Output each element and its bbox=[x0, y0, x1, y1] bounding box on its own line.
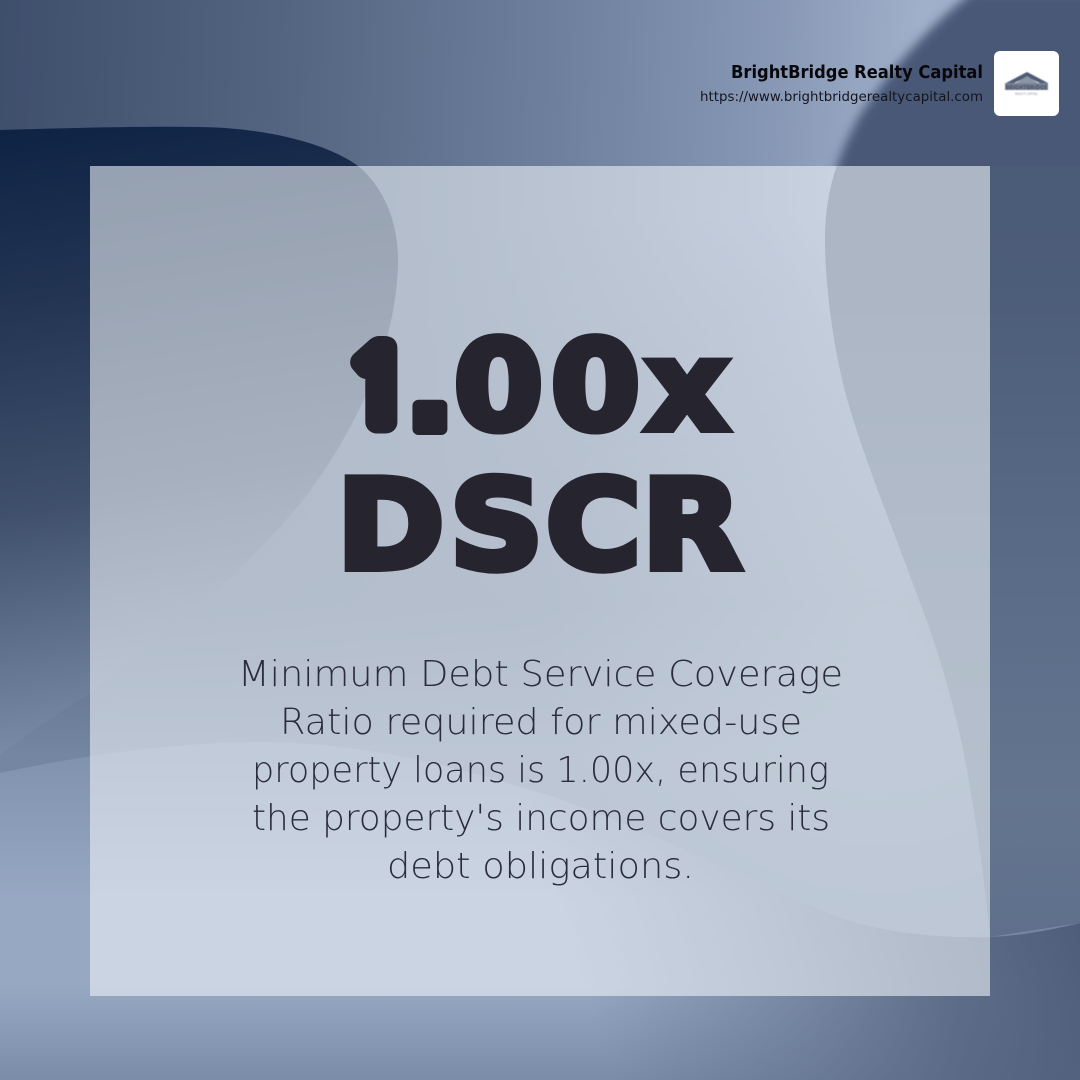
background shape: bottom wave bbox=[0, 742, 1080, 1080]
headline line 1: 1.00x bbox=[347, 315, 728, 458]
background shape: right dark band bbox=[825, 0, 1080, 937]
logo: BRIGHTBRIDGE bbox=[1006, 84, 1048, 92]
headline: 1.00x DSCR bbox=[337, 315, 742, 597]
description text: property loans is 1.00x, ensuring bbox=[252, 750, 829, 791]
brand header bbox=[700, 51, 1059, 116]
logo: REALTY CAPITAL bbox=[1015, 92, 1038, 96]
logo bbox=[994, 51, 1059, 116]
headline line 2: DSCR bbox=[337, 454, 742, 597]
description text: Ratio required for mixed-use bbox=[280, 702, 802, 743]
translucent content panel bbox=[90, 166, 990, 996]
brand url: https://www.brightbridgerealtycapital.com bbox=[700, 90, 983, 105]
description text: the property's income covers its bbox=[252, 798, 830, 839]
description text: Minimum Debt Service Coverage bbox=[238, 654, 843, 695]
background shape: dark top-left curve bbox=[0, 127, 398, 755]
description text bbox=[238, 654, 843, 887]
description text: debt obligations. bbox=[387, 846, 694, 887]
brand name: BrightBridge Realty Capital bbox=[731, 63, 983, 83]
